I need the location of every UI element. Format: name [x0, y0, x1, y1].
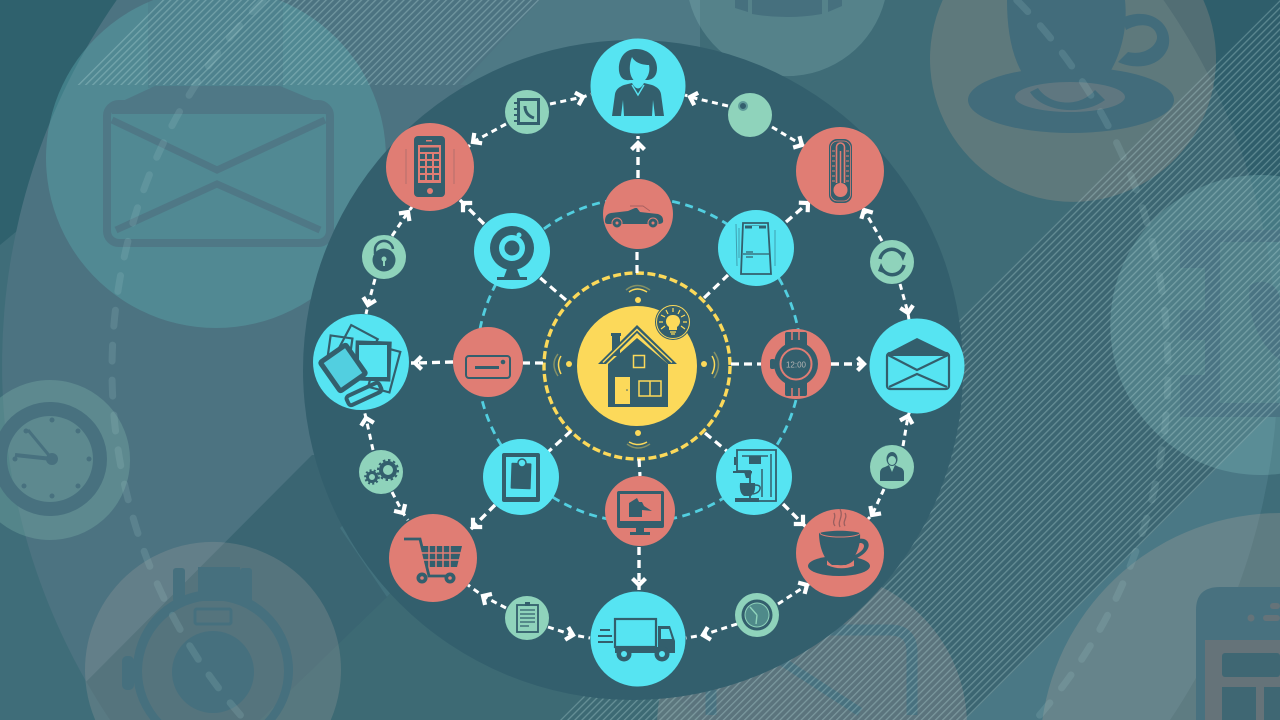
node: cart: [389, 514, 477, 602]
node: thermometer: [796, 127, 884, 215]
icon: address book: [514, 98, 540, 125]
icon: thermometer: [829, 139, 852, 203]
icon: coffee machine: [733, 450, 776, 502]
arrow: clipboard to truck: [548, 627, 590, 638]
arrow: fridge to thermometer: [786, 200, 811, 222]
radial arrows: [411, 136, 866, 590]
node: tablet: [483, 439, 559, 515]
arrow: dot to thermometer: [772, 127, 806, 147]
ghost circle: envelope: [46, 0, 386, 328]
arrow: contacts to woman: [550, 94, 591, 104]
arrow: refresh to envelope: [900, 284, 909, 320]
icon: shopping cart: [404, 539, 462, 584]
node: contacts book: [505, 90, 549, 134]
arrow: box to photos: [411, 362, 453, 363]
arrow: webcam to phone: [459, 199, 484, 224]
node: clipboard: [505, 596, 549, 640]
icon: envelope: [887, 338, 949, 389]
ghost circle: tablet: [657, 571, 967, 720]
ghost circle: browser: [1042, 513, 1280, 720]
icon: fridge: [736, 223, 775, 274]
icon: clock: [742, 600, 772, 630]
arrow: clock to truck: [686, 624, 737, 638]
icon: set-top box: [466, 356, 510, 378]
arrow: car to woman: [636, 136, 640, 178]
ghost circle: watch: [85, 542, 341, 720]
arrow: lock to phone: [392, 207, 412, 236]
ghost icon: tablet: [711, 630, 912, 715]
node: sensor dot: [728, 93, 772, 137]
arrow: monitor to truck: [637, 547, 641, 590]
node: lock: [362, 235, 406, 279]
arrow: clipboard to cart: [468, 585, 506, 608]
arrow: lock to photos: [366, 279, 375, 314]
node: person: [870, 445, 914, 489]
arrow: person to cup: [868, 489, 884, 519]
icon: man in suit: [880, 452, 904, 481]
central dark disk: [303, 40, 963, 700]
arrow: gears to cart: [392, 492, 408, 520]
icon: refresh arrows: [878, 249, 906, 275]
arrow: refresh to thermometer: [862, 206, 882, 241]
node: fridge: [718, 210, 794, 286]
icon: clipboard: [517, 602, 538, 632]
node: smart watch: [761, 329, 831, 399]
icon: tablet: [502, 453, 540, 502]
ghost circle: clock: [0, 380, 130, 540]
yellow dashed ring: [544, 273, 730, 459]
icon: truck: [598, 619, 675, 662]
node: coffee cup: [796, 509, 884, 597]
node: refresh: [870, 240, 914, 284]
arrow: coffee machine to cup: [783, 504, 806, 527]
ghost icon: address book: [1180, 230, 1280, 417]
ghost icon: watch: [122, 567, 293, 720]
icon: photos and devices: [317, 325, 400, 406]
icon: woman: [612, 49, 664, 116]
arrow: watch to envelope: [831, 362, 866, 366]
hub: smart house: [554, 286, 718, 448]
ghost circle: coffee cup: [930, 0, 1216, 202]
node: gears: [359, 450, 403, 494]
node: monitor: [605, 476, 675, 546]
spokes from hub: [523, 250, 761, 476]
outer ring arrows: [364, 94, 910, 638]
icon: smartphone: [406, 136, 454, 197]
arrow: clock to cup: [778, 583, 811, 604]
node: envelope: [870, 318, 964, 414]
ghost circle: address book: [1110, 175, 1280, 475]
arrow: dot to woman: [685, 95, 728, 106]
icon: house: [598, 325, 677, 407]
icon: gears: [365, 460, 398, 484]
node: webcam: [474, 213, 550, 289]
icon: webcam: [490, 226, 534, 280]
ghost icon: coffee cup: [968, 0, 1174, 133]
icon: open padlock: [372, 241, 396, 272]
ghost icon: envelope: [107, 0, 330, 243]
node: woman: [590, 38, 686, 134]
ghost icon: browser: [1196, 587, 1280, 720]
node: set-top box: [453, 327, 523, 397]
ghost icon: clock: [0, 402, 107, 516]
node: car: [603, 179, 673, 249]
node: coffee machine: [716, 439, 792, 515]
icon: light bulb badge: [655, 304, 691, 340]
icon: monitor: [617, 491, 664, 535]
node: phone: [386, 123, 474, 211]
watch time: 12:00: [786, 360, 807, 370]
icon: wireless signals: [554, 286, 718, 448]
icon: sensor dot: [739, 102, 747, 110]
inner cyan dashed ring: [477, 198, 801, 522]
node: clock: [735, 593, 779, 637]
node: photos: [313, 314, 409, 410]
ghost circle: shirt: [689, 0, 885, 76]
arrow: tablet to cart: [470, 505, 495, 530]
icon: car: [605, 206, 663, 228]
arrow: person to envelope: [903, 411, 910, 446]
ghost icon: shirt: [735, 0, 842, 17]
arrow: gears to photos: [364, 410, 373, 450]
node: truck: [590, 592, 686, 686]
arrow: contacts to phone: [468, 124, 506, 147]
icon: coffee cup: [808, 509, 870, 576]
